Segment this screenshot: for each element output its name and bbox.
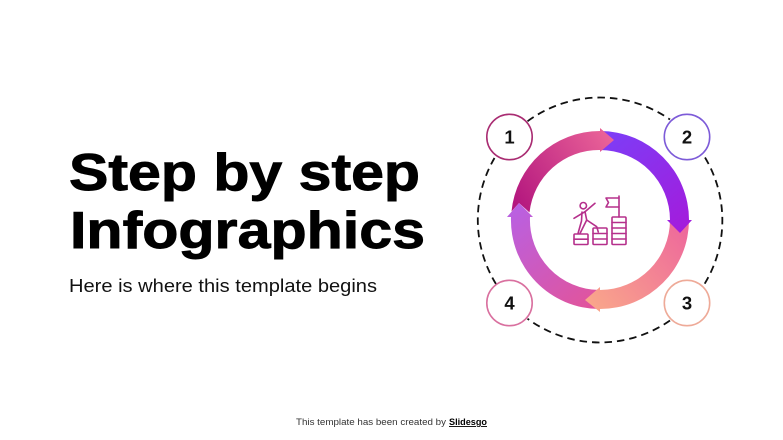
arrow segment 3 — [585, 220, 689, 312]
title: Infographics — [70, 202, 425, 260]
step node 4 — [487, 280, 532, 326]
step node 4: 4 — [504, 292, 515, 314]
title: Step by step — [69, 144, 420, 202]
step node 3: 3 — [682, 292, 692, 314]
step node 2: 2 — [682, 126, 692, 148]
arrow segment 1 — [512, 128, 614, 212]
dashed orbit circle — [478, 98, 722, 342]
circular arrow ring — [507, 128, 692, 312]
step node 3 — [664, 280, 710, 326]
icon: person climbing coin stacks to flag — [574, 196, 626, 244]
arrow segment 4 — [507, 203, 600, 309]
footer credit: Slidesgo — [449, 417, 488, 427]
step node 2 — [664, 114, 710, 160]
step node 1 — [487, 114, 532, 160]
footer credit: This template has been created by — [296, 417, 447, 427]
subtitle: Here is where this template begins — [69, 276, 377, 296]
step node 1: 1 — [504, 126, 515, 148]
title — [69, 144, 425, 260]
arrow segment 2 — [600, 131, 692, 233]
